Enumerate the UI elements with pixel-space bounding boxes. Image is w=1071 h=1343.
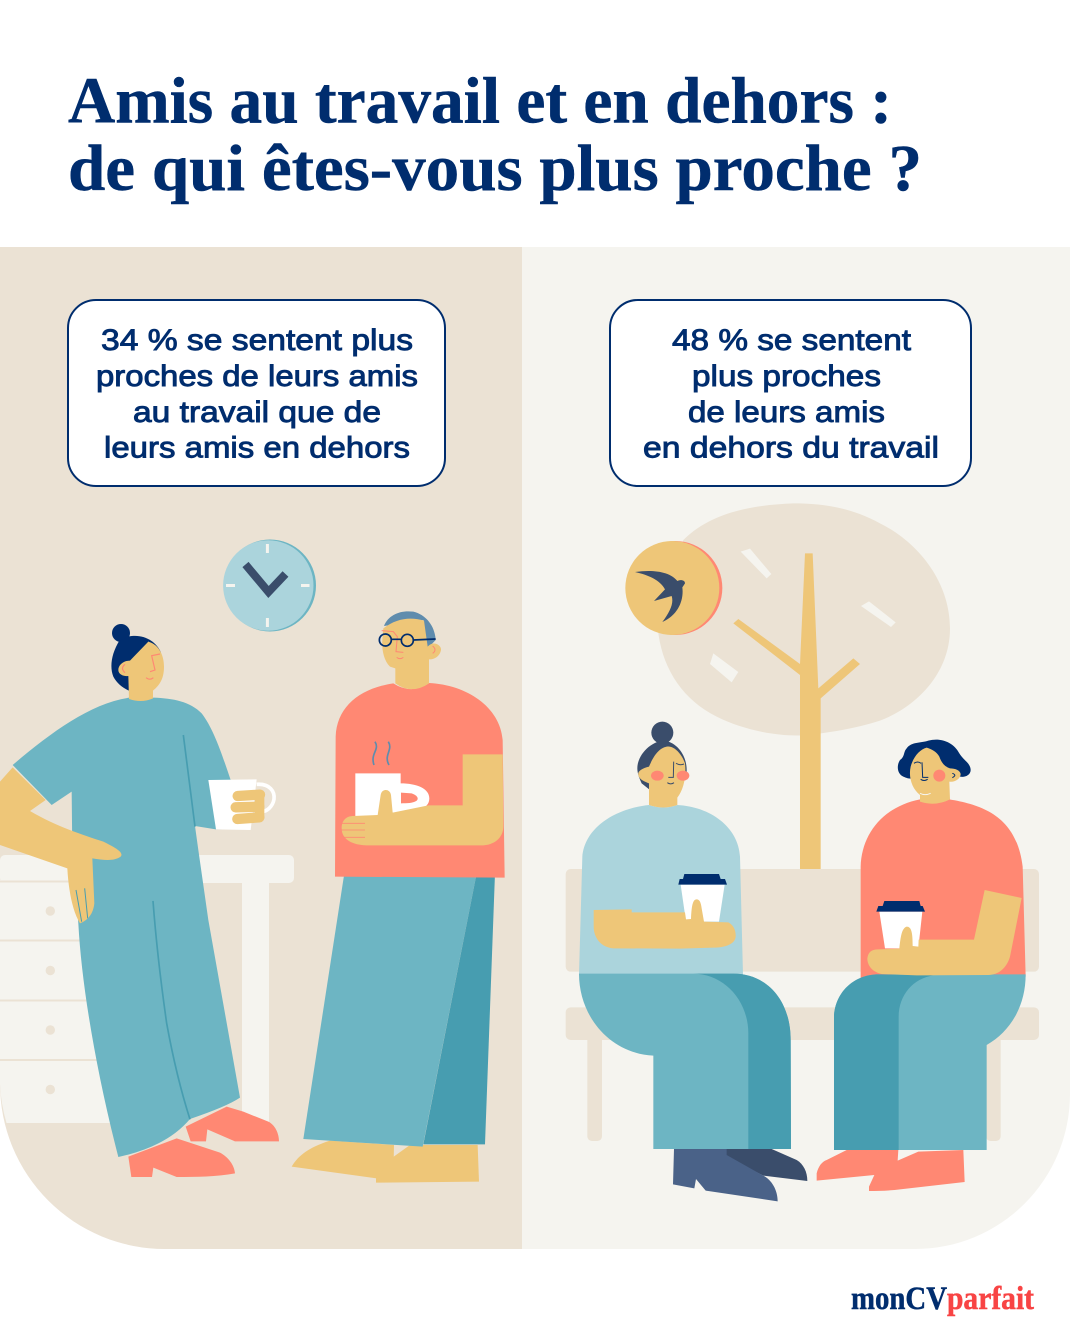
- callout: 48% closer to outside friends: [610, 300, 971, 486]
- panel: friends at work: [0, 247, 522, 1249]
- title: Amis au travail et en dehors :: [68, 64, 892, 138]
- arm holding mug: [341, 754, 503, 845]
- icon: sun with bird: [625, 541, 722, 635]
- takeaway cup and arm: [867, 890, 1022, 975]
- callout: 34% closer to work friends: leurs amis en dehors: [104, 432, 410, 464]
- logo: monCVparfait: monCV: [851, 1281, 947, 1317]
- icon: wall clock: [223, 540, 316, 632]
- callout: 34% closer to work friends: au travail que de: [133, 396, 381, 429]
- panel: friends outside work: [522, 247, 1070, 1249]
- logo: monCVparfait: [851, 1281, 1034, 1317]
- callout: 48% closer to outside friends: de leurs amis: [688, 396, 885, 429]
- head with short hair: [898, 740, 971, 804]
- bench: [566, 869, 1039, 1141]
- title: [68, 64, 922, 205]
- hand on mug: [236, 792, 264, 822]
- callout: 34% closer to work friends: proches de leurs amis: [96, 360, 418, 393]
- callout: 34% closer to work friends: [68, 300, 445, 486]
- tree foliage: [658, 503, 950, 735]
- leaves: [710, 549, 896, 682]
- arm on hip: [0, 767, 121, 923]
- logo: monCVparfait: parfait: [947, 1281, 1034, 1317]
- callout: 48% closer to outside friends: plus proches: [692, 360, 881, 393]
- callout: 48% closer to outside friends: 48 % se sentent: [672, 324, 912, 357]
- furniture: drawers and table: [0, 855, 294, 1130]
- callout: 48% closer to outside friends: en dehors du travail: [643, 432, 939, 464]
- figure: woman with mug: [0, 624, 279, 1177]
- takeaway cup and arm: [594, 874, 736, 949]
- mug with steam: [355, 742, 429, 817]
- callout: 34% closer to work friends: 34 % se sentent plus: [101, 324, 413, 357]
- figure: seated woman with bun: [579, 722, 807, 1201]
- figure: seated person with short hair: [817, 740, 1026, 1191]
- title: de qui êtes-vous plus proche ?: [68, 132, 922, 205]
- tree trunk: [733, 553, 860, 869]
- head with bun: [637, 722, 689, 807]
- mug: [208, 779, 274, 830]
- figure: man with glasses and mug: [292, 611, 505, 1183]
- head with glasses: [379, 611, 441, 689]
- hair and head: [111, 624, 164, 701]
